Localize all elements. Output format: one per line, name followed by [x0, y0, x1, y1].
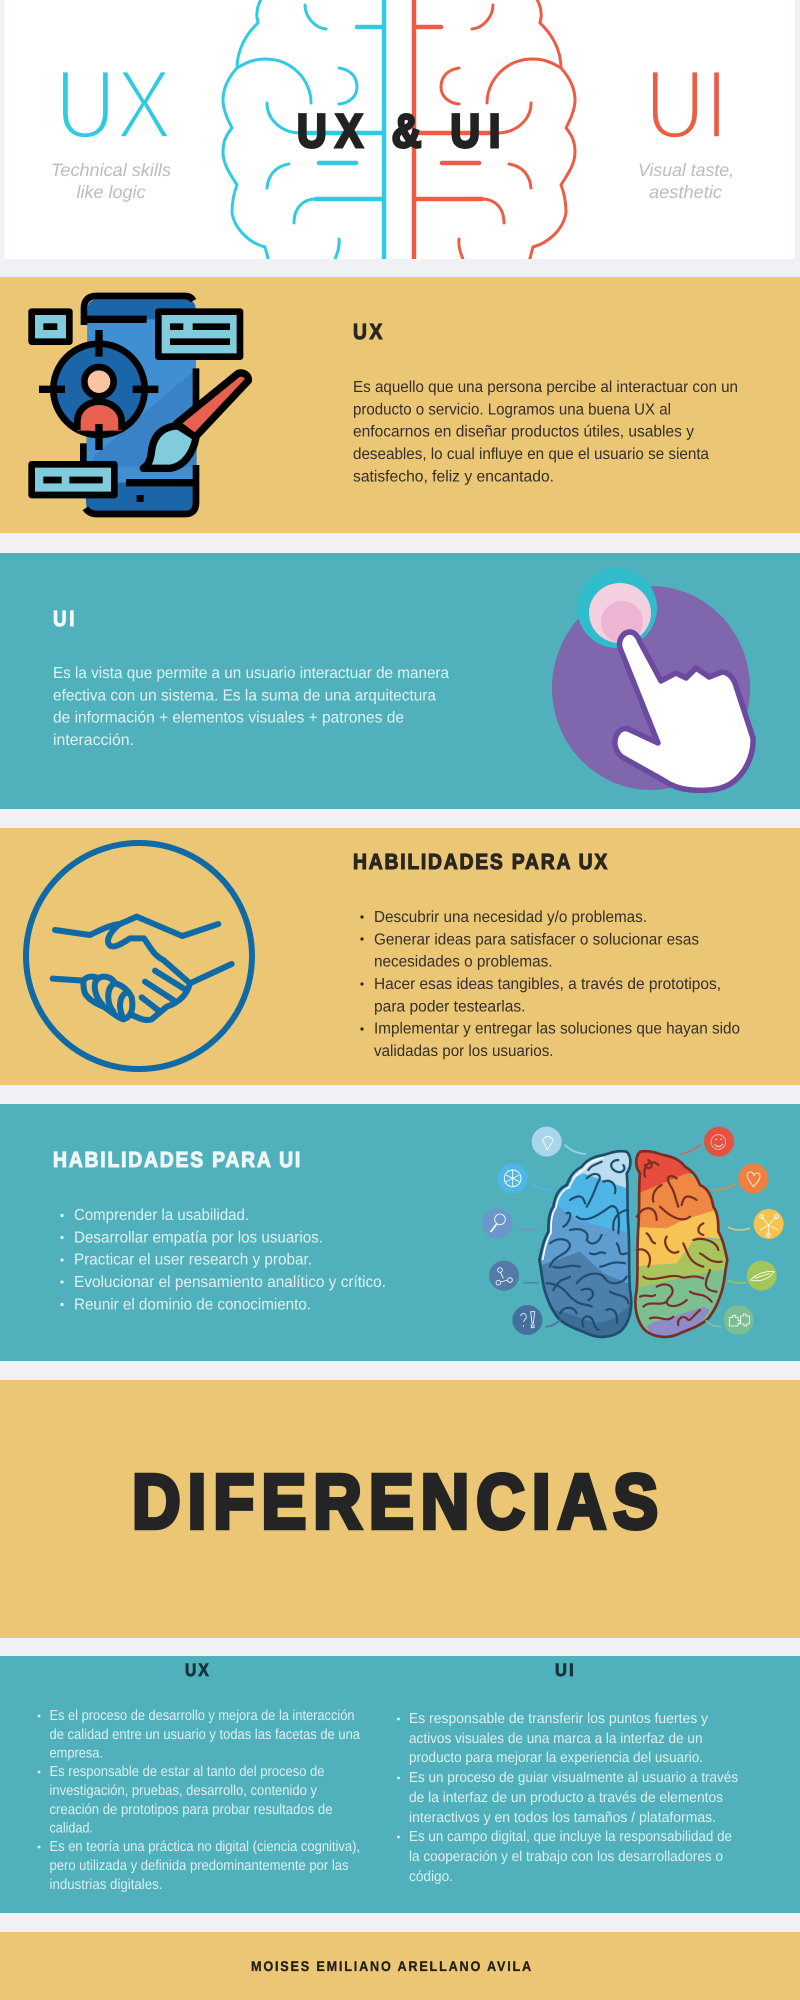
- bullet list: [360, 909, 740, 1060]
- circle icon: globe: [498, 1163, 528, 1193]
- UX list: investigación, pruebas, desarrollo, contenido y: [50, 1783, 318, 1799]
- connector lines: [520, 1145, 749, 1327]
- panel: UX definition: [0, 277, 800, 533]
- panel: footer: [0, 1932, 800, 2000]
- left hemisphere: [538, 1150, 633, 1338]
- body text: Es aquello que una persona percibe al interactuar con un: [353, 379, 738, 396]
- panel: skills for UX: [0, 828, 800, 1085]
- icon: tapping hand: [552, 568, 753, 790]
- UX list: Es el proceso de desarrollo y mejora de la interacción: [50, 1708, 354, 1724]
- author name: MOISES EMILIANO ARELLANO AVILA: [251, 1958, 533, 1974]
- UX list: Es responsable de estar al tanto del proceso de: [50, 1764, 324, 1780]
- panel: UI definition: [0, 553, 800, 809]
- body text: [353, 379, 738, 485]
- column heading UI: UI: [555, 1660, 576, 1680]
- circle icon: nodes: [489, 1261, 519, 1291]
- small box: [32, 312, 69, 342]
- body text: interacción.: [53, 732, 134, 749]
- UI list: activos visuales de una marca a la interfaz de un: [409, 1731, 702, 1747]
- circle icon: network: [754, 1209, 784, 1239]
- brain left half: [223, 0, 384, 262]
- UI list: interactivos y en todos los tamaños / plataformas.: [409, 1810, 716, 1826]
- UX list: [38, 1708, 361, 1893]
- caption: UX: [51, 160, 171, 202]
- body text: satisfecho, feliz y encantado.: [353, 468, 554, 485]
- body text: de información + elementos visuales + patrones de: [53, 710, 404, 727]
- bullet list: Practicar el user research y probar.: [74, 1252, 312, 1269]
- body text: efectiva con un sistema. Es la suma de una arquitectura: [53, 687, 436, 704]
- UI list: la cooperación y el trabajo con los desarrolladores o: [409, 1849, 723, 1865]
- circle icon: heart: [738, 1163, 768, 1193]
- bullet list: para poder testearlas.: [374, 998, 526, 1015]
- right hemisphere: [634, 1150, 729, 1338]
- UI list: de la interfaz de un producto a través de elementos: [409, 1790, 723, 1806]
- bullet list: Reunir el dominio de conocimiento.: [74, 1296, 311, 1313]
- big label UI: UI: [645, 49, 728, 159]
- UI list: Es un campo digital, que incluye la responsabilidad de: [409, 1829, 732, 1845]
- caption: UX: like logic: [76, 182, 146, 202]
- bullet list: [60, 1207, 386, 1313]
- panel: comparison: [0, 1656, 800, 1913]
- brush: [177, 373, 248, 437]
- caption: UI: Visual taste,: [638, 160, 734, 180]
- bullet list: Hacer esas ideas tangibles, a través de prototipos,: [374, 976, 721, 993]
- title: UX & UI: [297, 104, 509, 157]
- UI list: Es responsable de transferir los puntos fuertes y: [409, 1711, 709, 1727]
- column heading UX: UX: [185, 1660, 211, 1680]
- UI list: Es un proceso de guiar visualmente al usuario a través: [409, 1770, 738, 1786]
- bullet list: Implementar y entregar las soluciones que hayan sido: [374, 1021, 740, 1038]
- brain right half: [414, 0, 575, 262]
- caption: UX: Technical skills: [51, 160, 171, 180]
- panel: header: [4, 0, 795, 262]
- UI list: producto para mejorar la experiencia del usuario.: [409, 1750, 703, 1766]
- body text: producto o servicio. Logramos una buena UX al: [353, 401, 671, 418]
- heading DIFERENCIAS: DIFERENCIAS: [132, 1459, 665, 1545]
- body text: enfocarnos en diseñar productos útiles, usables y: [353, 424, 694, 441]
- icon: handshake: [26, 843, 252, 1069]
- UI list: código.: [409, 1869, 453, 1885]
- circle icon: puzzle: [724, 1305, 754, 1335]
- panel: skills for UI: [0, 1104, 800, 1361]
- UX list: Es en teoría una práctica no digital (ciencia cognitiva),: [50, 1839, 360, 1855]
- bullet list: Desarrollar empatía por los usuarios.: [74, 1229, 323, 1246]
- bullet list: validadas por los usuarios.: [374, 1043, 554, 1060]
- bullet list: Comprender la usabilidad.: [74, 1207, 249, 1224]
- icon: colored brain with circles: [482, 1127, 784, 1343]
- circle icon: magnifier: [482, 1208, 512, 1238]
- bottom box: [32, 464, 114, 495]
- heading UX: UX: [353, 319, 385, 344]
- phone body: [86, 299, 196, 513]
- UI list: [397, 1711, 738, 1885]
- UX list: pero utilizada y definida predominantemente por las: [50, 1858, 348, 1874]
- circle icon: question and exclamation: [512, 1305, 542, 1335]
- bullet list: Descubrir una necesidad y/o problemas.: [374, 909, 647, 926]
- UX list: creación de prototipos para probar resultados de: [50, 1802, 332, 1818]
- bullet list: Evolucionar el pensamiento analítico y crítico.: [74, 1274, 386, 1291]
- circle icon: leaf: [747, 1261, 777, 1291]
- panel: differences banner: [0, 1380, 800, 1638]
- body text: [53, 665, 449, 749]
- bullet list: Generar ideas para satisfacer o solucionar esas: [374, 931, 699, 948]
- big label UX: UX: [55, 49, 172, 159]
- UX list: industrias digitales.: [50, 1877, 162, 1893]
- bullet list: necesidades o problemas.: [374, 954, 552, 971]
- caption: UI: aesthetic: [649, 182, 722, 202]
- UX list: calidad.: [50, 1820, 93, 1836]
- target: [53, 344, 145, 435]
- UX list: empresa.: [50, 1746, 103, 1762]
- icon: brain line drawing: [223, 0, 575, 262]
- body text: deseables, lo cual influye en que el usuario se sienta: [353, 446, 709, 463]
- caption: UI: [638, 160, 734, 202]
- heading UI: UI: [53, 606, 77, 631]
- text box: [158, 312, 240, 357]
- UX list: de calidad entre un usuario y todas las facetas de una: [50, 1727, 361, 1743]
- circle icon: bulb: [532, 1127, 562, 1157]
- icon: phone with target and brush: [32, 296, 248, 514]
- circle icon: smile: [704, 1127, 734, 1157]
- heading: HABILIDADES PARA UX: [353, 849, 609, 874]
- heading: HABILIDADES PARA UI: [53, 1147, 302, 1172]
- body text: Es la vista que permite a un usuario interactuar de manera: [53, 665, 449, 682]
- person: [77, 402, 122, 431]
